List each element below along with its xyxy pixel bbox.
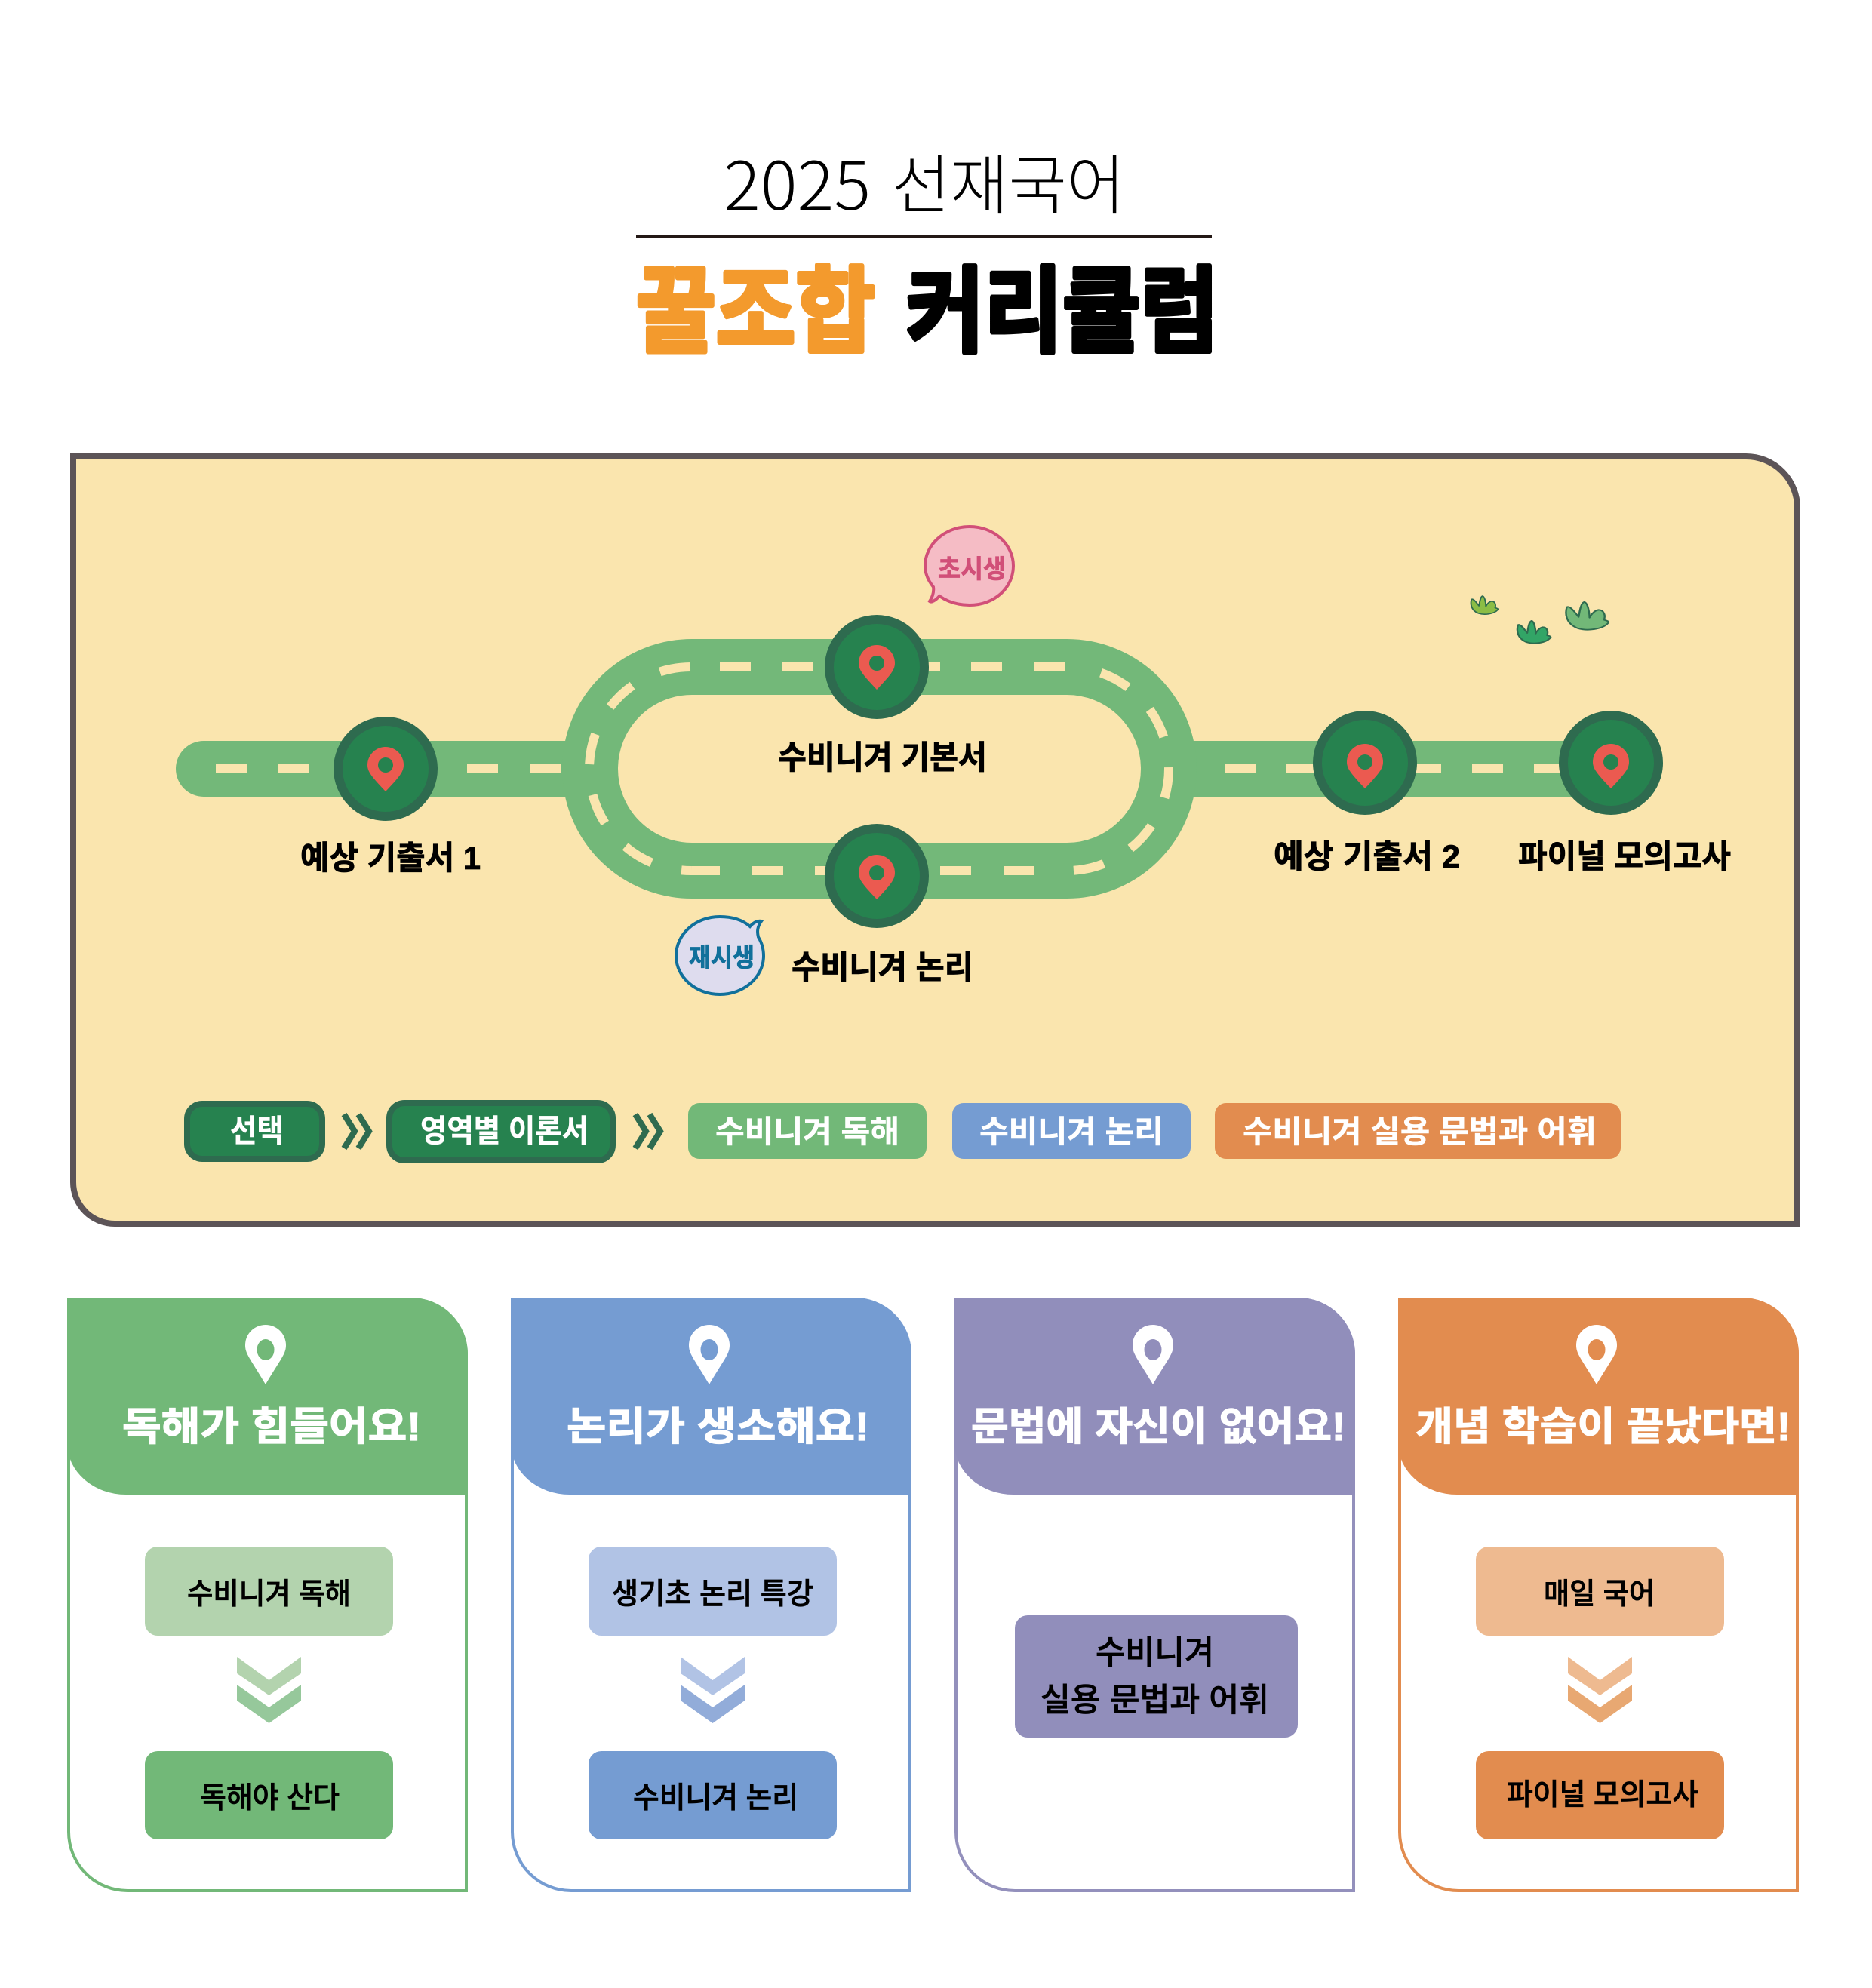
title block bbox=[636, 134, 1219, 364]
marker: 파이널 모의고사 bbox=[1559, 711, 1663, 815]
title: 꿀조합: 꿀조합 bbox=[636, 260, 875, 364]
step: 수비니겨 독해 bbox=[145, 1547, 393, 1636]
label: 수비니겨 논리: 수비니겨 논리 bbox=[792, 950, 973, 986]
step: 파이널 모의고사: 파이널 모의고사 bbox=[1507, 1779, 1698, 1811]
arrow: down chevrons bbox=[681, 1657, 745, 1723]
panel: card 개념 bbox=[1398, 1298, 1799, 1891]
panel: card 독해 bbox=[67, 1298, 468, 1891]
legend: 영역별 이론서 bbox=[389, 1103, 613, 1160]
label: 예상 기출서 2: 예상 기출서 2 bbox=[1274, 839, 1460, 875]
legend: 수비니겨 독해 bbox=[688, 1103, 927, 1159]
step: 매일 국어 bbox=[1476, 1547, 1724, 1636]
step: 수비니겨 실용 문법과 어휘 bbox=[1015, 1615, 1298, 1738]
title: 2025 선재국어: 2025 bbox=[724, 134, 871, 229]
arrow: down chevrons bbox=[237, 1657, 301, 1723]
marker: 예상 기출서 2 bbox=[1313, 711, 1417, 815]
arrow: double chevron 1 bbox=[344, 1114, 369, 1148]
panel: roadmap bbox=[73, 456, 1797, 1224]
legend: 선택 bbox=[187, 1104, 322, 1159]
title: 2025 선재국어: 선재국어 bbox=[892, 151, 1125, 223]
step: 파이널 모의고사 bbox=[1476, 1751, 1724, 1839]
marker: 예상 기출서 1 bbox=[334, 717, 438, 821]
icon: header pin bbox=[245, 1325, 286, 1384]
panel: card 논리 bbox=[511, 1298, 911, 1891]
label: 수비니겨 기본서: 수비니겨 기본서 bbox=[778, 740, 987, 776]
step: 생기초 논리 특강 bbox=[589, 1547, 837, 1636]
road bbox=[204, 662, 1611, 875]
step: 생기초 논리 특강: 생기초 논리 특강 bbox=[612, 1578, 813, 1611]
step: 수비니겨 논리 bbox=[589, 1751, 837, 1839]
legend: 영역별 이론서: 영역별 이론서 bbox=[420, 1114, 589, 1148]
legend: 수비니겨 논리: 수비니겨 논리 bbox=[979, 1114, 1163, 1149]
legend: 수비니겨 실용 문법과 어휘: 수비니겨 실용 문법과 어휘 bbox=[1243, 1114, 1597, 1149]
icon: grass tufts bbox=[1471, 596, 1609, 644]
panel: card 문법 bbox=[954, 1298, 1355, 1891]
legend: 수비니겨 실용 문법과 어휘 bbox=[1215, 1103, 1621, 1159]
marker: 수비니겨 논리 bbox=[825, 824, 929, 928]
icon: header pin bbox=[689, 1325, 730, 1384]
label: 파이널 모의고사: 파이널 모의고사 bbox=[1518, 839, 1731, 875]
title: 2025 선재국어 bbox=[724, 134, 1125, 229]
callout: 초시생 bbox=[925, 527, 1013, 605]
arrow: double chevron 2 bbox=[635, 1114, 660, 1148]
icon: header pin bbox=[1576, 1325, 1617, 1384]
callout: 초시생: 초시생 bbox=[938, 555, 1006, 584]
title: 커리큘럼: 커리큘럼 bbox=[906, 260, 1219, 364]
legend: 선택: 선택 bbox=[230, 1114, 284, 1148]
legend: 수비니겨 논리 bbox=[952, 1103, 1191, 1159]
card heading: 개념 학습이 끝났다면! bbox=[1416, 1406, 1791, 1449]
legend: 수비니겨 독해: 수비니겨 독해 bbox=[715, 1114, 899, 1149]
step: 독해야 산다 bbox=[145, 1751, 393, 1839]
step: 수비니겨 독해: 수비니겨 독해 bbox=[187, 1578, 351, 1611]
step: 수비니겨 실용 문법과 어휘: 수비니겨 bbox=[1096, 1635, 1214, 1671]
step: 수비니겨 실용 문법과 어휘: 실용 문법과 어휘 bbox=[1041, 1682, 1269, 1719]
callout: 재시생: 재시생 bbox=[689, 944, 755, 972]
label: 예상 기출서 1: 예상 기출서 1 bbox=[300, 840, 481, 877]
icon: header pin bbox=[1133, 1325, 1173, 1384]
card heading: 논리가 생소해요! bbox=[567, 1406, 869, 1449]
card heading: 독해가 힘들어요! bbox=[122, 1406, 421, 1449]
step: 수비니겨 논리: 수비니겨 논리 bbox=[633, 1782, 798, 1814]
arrow: down chevrons bbox=[1568, 1657, 1632, 1723]
marker: 수비니겨 기본서 bbox=[825, 615, 929, 719]
callout: 재시생 bbox=[676, 917, 764, 994]
step: 독해야 산다: 독해야 산다 bbox=[200, 1782, 340, 1814]
step: 매일 국어: 매일 국어 bbox=[1544, 1578, 1655, 1611]
card heading: 문법에 자신이 없어요! bbox=[971, 1406, 1345, 1449]
